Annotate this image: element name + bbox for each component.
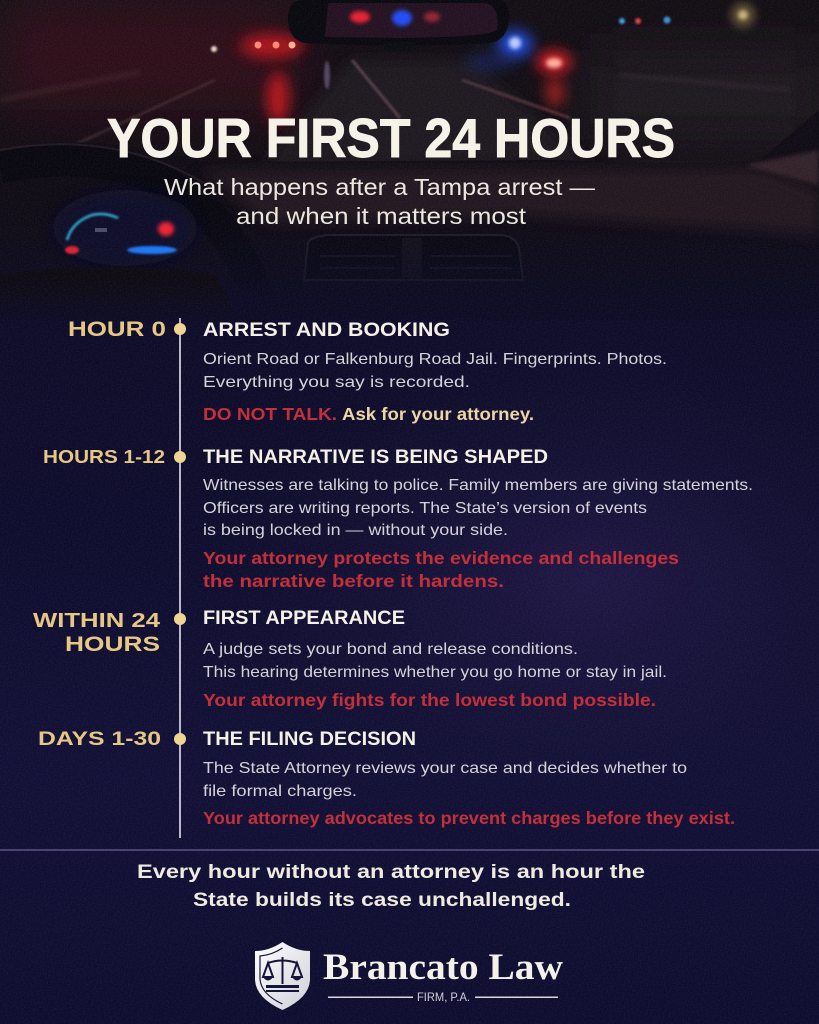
timeline step: within 24 hours: This hearing determines whether you go home or stay in jail. [203,664,667,681]
timeline line [179,318,181,838]
timeline step: hours 1-12 [43,447,753,591]
timeline step: days 1-30: file formal charges. [203,783,357,800]
closing statement: Every hour without an attorney is an hour the [137,862,645,883]
subtitle [164,174,595,229]
timeline step: hours 1-12: Officers are writing reports. The State’s version of events [203,500,647,517]
subtitle: What happens after a Tampa arrest — [164,174,595,200]
logo: Brancato Law Firm: FIRM, P.A. [417,990,470,1004]
subtitle: and when it matters most [236,203,527,229]
icon: instrument cluster [0,190,260,320]
police lights [240,34,304,58]
timeline step: days 1-30: The State Attorney reviews your case and decides whether to [203,760,687,777]
timeline step: days 1-30 [38,729,735,828]
icon: shield with scales [255,942,310,1010]
timeline step: days 1-30: DAYS 1-30 [38,729,161,750]
timeline step: hour 0: ARREST AND BOOKING [203,320,450,341]
title: YOUR FIRST 24 HOURS [107,107,675,169]
closing statement [137,862,645,911]
timeline step: within 24 hours: WITHIN 24 [33,610,161,632]
logo: Brancato Law Firm [255,942,563,1010]
timeline step: within 24 hours: FIRST APPEARANCE [203,608,405,629]
timeline step: days 1-30: Your attorney advocates to prevent charges before they exist. [203,808,735,828]
icon: rear-view mirror [288,0,509,51]
closing statement: State builds its case unchallenged. [193,890,571,911]
timeline step: within 24 hours: Your attorney fights for the lowest bond possible. [203,690,656,710]
timeline step: within 24 hours: A judge sets your bond and release conditions. [203,641,578,658]
timeline step: days 1-30: THE FILING DECISION [203,729,416,750]
timeline step: hour 0: Everything you say is recorded. [203,374,470,391]
logo: Brancato Law Firm: Brancato Law [323,947,563,988]
timeline step: hours 1-12: the narrative before it hardens. [203,571,504,591]
photo: night road through windshield [0,0,819,175]
timeline step: hour 0 [68,318,667,424]
timeline step: hour 0: Orient Road or Falkenburg Road Jail. Fingerprints. Photos. [203,351,667,368]
timeline step: hours 1-12: Your attorney protects the evidence and challenges [203,548,679,568]
timeline step: hours 1-12: Witnesses are talking to police. Family members are giving statements. [203,477,753,494]
timeline step: hours 1-12: is being locked in — without your side. [203,522,508,539]
divider [0,849,819,851]
timeline step: hour 0: DO NOT TALK. [203,404,337,424]
timeline step: hours 1-12: THE NARRATIVE IS BEING SHAPED [203,447,548,468]
photo: dashboard [0,110,819,320]
timeline step: hour 0: HOUR 0 [68,318,166,341]
timeline step: within 24 hours [33,608,667,710]
timeline step: hours 1-12: HOURS 1-12 [43,447,165,467]
timeline step: hour 0: Ask for your attorney. [342,404,534,424]
timeline step: within 24 hours: HOURS [65,633,160,656]
